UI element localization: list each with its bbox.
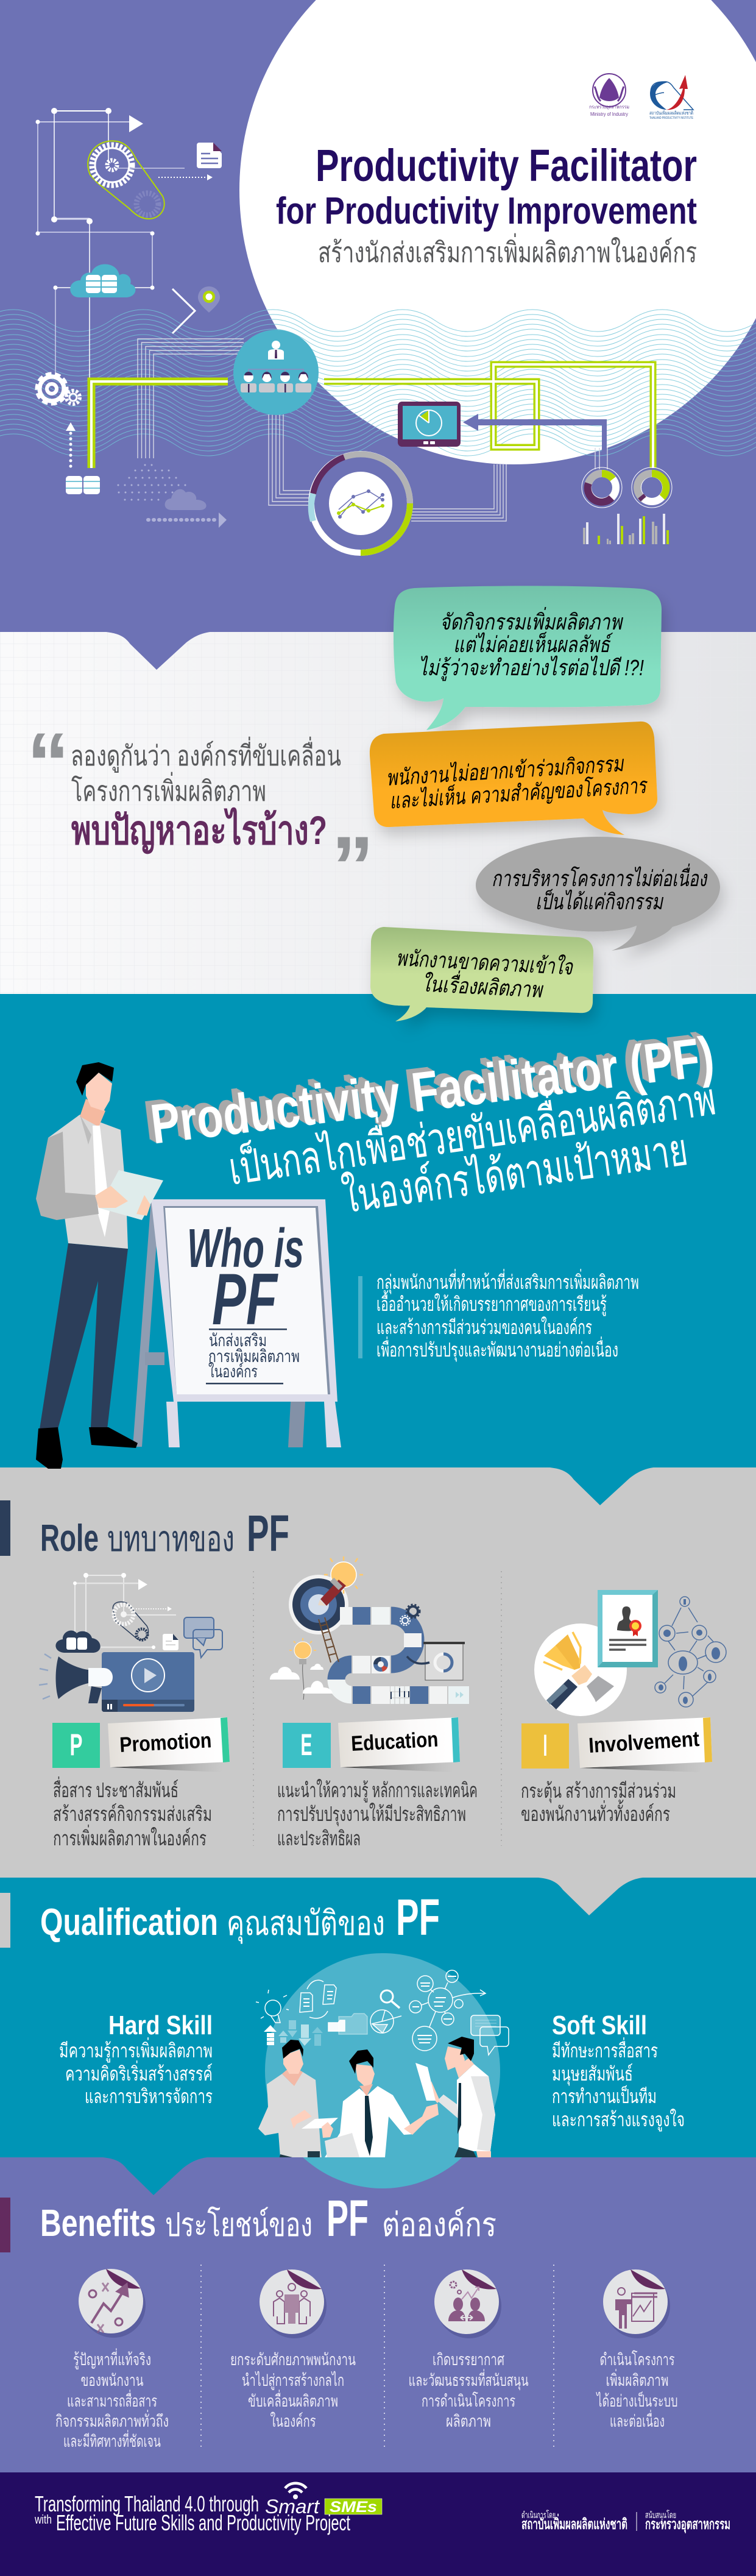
icon: strategy sticker: [79, 2269, 146, 2338]
heading: Benefits: PF: [327, 2190, 369, 2247]
text: benefit 1: กิจกรรมผลิตภาพทั่วถึง: [55, 2410, 169, 2430]
panel: hero background: [0, 0, 756, 632]
text: benefit 2: [230, 2351, 356, 2430]
logo: Thailand Productivity Institute: THAILAND PRODUCTIVITY INSTITUTE: [649, 116, 693, 120]
notch: gray into qualification section: [524, 1877, 652, 1915]
badge: I: I: [543, 1728, 547, 1762]
text block: who is PF description: และสร้างการมีส่วนร่วมของคนในองค์กร: [376, 1316, 592, 1338]
icon: geared belt: [88, 141, 164, 219]
text: promotion description: การเพิ่มผลิตภาพในองค์กร: [53, 1825, 207, 1850]
speech bubble: teal: จัดกิจกรรมเพิ่มผลิตภาพ: [440, 606, 624, 634]
doodle: magnifier and pie: [370, 1990, 401, 2033]
doodle: arrows bars: [264, 2020, 323, 2046]
logos: [589, 74, 693, 120]
text: education description: แนะนำให้ความรู้ หลักการและเทคนิค: [277, 1779, 478, 1803]
doodle: light bulb: [256, 1990, 289, 2023]
text: Hard Skill: Hard Skill: [108, 2010, 213, 2040]
label: Education: Education: [350, 1728, 439, 1756]
logo: Ministry of Industry seal: กระทรวงอุตสาหกรรม: [589, 104, 629, 110]
text: benefit 2: นำไปสู่การสร้างกลไก: [242, 2371, 344, 2390]
label: Promotion: Promotion: [119, 1728, 212, 1757]
heading: Role: Role: [40, 1517, 99, 1559]
subheading: PF mechanism: [225, 1067, 719, 1222]
badge: P: [52, 1723, 100, 1768]
footer: smart SMEs logo: SMEs: [330, 2499, 377, 2516]
text: Hard Skill: มีความรู้การเพิ่มผลิตภาพ: [59, 2037, 213, 2063]
text: education description: [277, 1779, 478, 1850]
qualification circle: [265, 1953, 500, 2188]
text: Soft Skill: Soft Skill: [552, 2010, 647, 2040]
text: benefit 1: ของพนักงาน: [80, 2371, 144, 2390]
dotted dividers: role: [253, 1571, 501, 1846]
heading: Benefits: ประโยชน์ของ: [165, 2206, 313, 2243]
panel: benefits background: [0, 2157, 756, 2472]
icon: promotion illustration: [39, 1573, 222, 1712]
notch: purple into question section: [91, 631, 219, 670]
text: involvement description: [521, 1779, 676, 1825]
text: benefit 3: และวัฒนธรรมที่สนับสนุน: [408, 2369, 529, 2391]
logo: Thailand Productivity Institute: สถาบันเพิ่มผลผลิตแห่งชาติ: [649, 110, 693, 116]
text: Soft Skill: มีทักษะการสื่อสาร: [552, 2037, 658, 2062]
icon: collaboration sticker: [434, 2269, 501, 2338]
text: benefit 2: ยกระดับศักยภาพพนักงาน: [230, 2351, 356, 2369]
panel: role background: [0, 1467, 756, 1878]
icon: education illustration: [270, 1556, 469, 1704]
footer: organizers: สนับสนุนโดย: [645, 2510, 676, 2521]
illustration: three business people: [258, 2037, 495, 2157]
notch: teal into role section: [535, 1467, 663, 1505]
icon: document: [197, 143, 222, 168]
text: benefit 3: การดำเนินโครงการ: [422, 2392, 515, 2410]
chart: donut right: [632, 467, 672, 508]
text: promotion description: สื่อสาร ประชาสัมพันธ์: [53, 1776, 178, 1801]
icon: chevron: [172, 289, 195, 333]
chart: small bars: [583, 514, 669, 544]
heading: Benefits: [0, 2190, 496, 2252]
icon: org chart circle: [233, 330, 319, 415]
footer: smart SMEs logo: Smart: [265, 2496, 320, 2517]
panel: footer background: [0, 2472, 756, 2576]
heading: Benefits: Benefits: [40, 2202, 156, 2244]
text: involvement description: กระตุ้น สร้างการมีส่วนร่วม: [521, 1779, 676, 1803]
white title circle: [239, 0, 756, 464]
person: left man in gray: [258, 2040, 338, 2157]
connector: lime rail right: [324, 364, 653, 468]
text: education description: การปรับปรุงงานให้มีประสิทธิภาพ: [277, 1803, 466, 1826]
text: benefit 3: ผลิตภาพ: [446, 2412, 491, 2430]
board text: Who is PF: PF: [212, 1258, 278, 1340]
logo: Ministry of Industry seal: [589, 74, 629, 117]
people: team row: [241, 372, 311, 392]
board text: Who is PF: การเพิ่มผลิตภาพ: [208, 1344, 300, 1366]
text: Hard Skill: และการบริหารจัดการ: [85, 2085, 213, 2107]
board text: Who is PF: Who is: [187, 1218, 304, 1279]
text: benefit 4: เพิ่มผลิตภาพ: [606, 2369, 669, 2390]
arrow: dotted right: [148, 513, 227, 528]
panel: qualification background: [0, 1878, 756, 2157]
icon: involvement illustration: [534, 1590, 726, 1716]
footer: organizers: ดำเนินการโดย: [521, 2510, 556, 2521]
dotted dividers: benefits: [201, 2265, 554, 2448]
board text: Who is PF: ในองค์กร: [208, 1361, 258, 1381]
logo: Thailand Productivity Institute: [649, 75, 693, 120]
wave line pattern: [0, 310, 756, 456]
doodle: chat: [471, 2015, 509, 2055]
text: benefit 3: [408, 2351, 529, 2430]
doodles: ideas and mind map: [256, 1970, 509, 2055]
person: right man: [415, 2037, 495, 2157]
icon: location pin: [198, 286, 220, 313]
footer: organizers: สถาบันเพิ่มผลผลิตแห่งชาติ: [521, 2513, 627, 2533]
badge: E: [283, 1723, 331, 1768]
footer: project title: Effective Future Skills and Productivity Project: [56, 2510, 350, 2535]
footer: smart SMEs logo: [265, 2483, 382, 2517]
heading: Qualification: PF: [396, 1889, 440, 1946]
text: Soft Skill: มนุษยสัมพันธ์: [552, 2063, 633, 2086]
text: Hard Skill: ความคิดริเริ่มสร้างสรรค์: [65, 2060, 213, 2085]
label: Education: [338, 1717, 460, 1772]
doodle: documents: [300, 1980, 336, 2018]
footer: organizers: [521, 2510, 730, 2534]
question text: ลองดูกันว่า องค์กรที่ขับเคลื่อน: [71, 736, 341, 773]
badge: E: E: [301, 1728, 312, 1762]
heading: Qualification: [0, 1889, 440, 1948]
notch: teal into benefits section: [88, 2157, 216, 2195]
heading: Role: PF: [247, 1505, 289, 1562]
person: center man in white: [325, 2049, 439, 2157]
question text: [71, 736, 341, 854]
text: Soft Skill: การทำงานเป็นทีม: [552, 2085, 657, 2107]
panel: question section background: [0, 632, 756, 994]
text: benefit 2: ในองค์กร: [270, 2411, 316, 2430]
text: benefit 3: เกิดบรรยากาศ: [433, 2351, 504, 2369]
heading: Qualification: Qualification: [40, 1901, 218, 1943]
speech bubble: green: พนักงานขาดความเข้าใจ: [395, 945, 574, 979]
chart: big ring with line chart: [311, 454, 410, 553]
text: benefit 1: และมีทิศทางที่ชัดเจน: [63, 2430, 161, 2450]
close quote mark: ”: [331, 818, 374, 914]
text block: who is PF description: [358, 1269, 639, 1362]
text: benefit 4: [596, 2351, 677, 2430]
text: benefit 4: ดำเนินโครงการ: [599, 2351, 675, 2369]
speech bubble: teal: [394, 586, 662, 730]
decorative dots and cloud: [117, 464, 207, 510]
text: benefit 4: และต่อเนื่อง: [610, 2410, 665, 2430]
text: involvement description: ของพนักงานทั่วทั้งองค์กร: [521, 1800, 670, 1825]
speech bubble: teal: แต่ไม่ค่อยเห็นผลลัพธ์: [453, 631, 613, 657]
text: promotion description: [53, 1776, 212, 1850]
heading: Role: [0, 1500, 289, 1562]
text: benefit 4: ได้อย่างเป็นระบบ: [596, 2390, 677, 2410]
illustration: standing man: [36, 1062, 163, 1469]
connector: lime rail left: [91, 381, 228, 468]
doodle: folders: [328, 2014, 367, 2034]
panel: who is PF background: [0, 994, 756, 1467]
open quote mark: “: [27, 715, 69, 811]
arrow: dotted up: [66, 422, 76, 468]
icon: cloud database: [70, 264, 135, 297]
connector lines: gray bundles: [138, 339, 607, 521]
chart: donut left: [582, 467, 622, 508]
badge: I: [521, 1723, 569, 1769]
question block: [27, 715, 374, 914]
label: Involvement: Involvement: [588, 1727, 700, 1758]
logo: Ministry of Industry seal: Ministry of Industry: [590, 112, 628, 117]
icon: gears left: [38, 375, 80, 404]
speech bubble: green: [370, 927, 593, 1021]
illustration: easel board: [133, 1199, 341, 1447]
heading: Qualification: คุณสมบัติของ: [227, 1904, 385, 1944]
question text: พบปัญหาอะไรบ้าง?: [71, 807, 327, 854]
text: benefit 1: รู้ปัญหาที่แท้จริง: [73, 2348, 151, 2369]
text: Hard Skill: [59, 2010, 213, 2107]
icon: presenter sticker: [603, 2269, 670, 2338]
footer: project title: Transforming Thailand 4.0 through: [35, 2491, 259, 2516]
label: Promotion: [108, 1717, 230, 1772]
arrow: purple to tablet: [463, 414, 607, 454]
person: manager: [268, 341, 284, 360]
title: [276, 140, 697, 232]
board text: Who is PF: [187, 1218, 304, 1385]
text block: who is PF description: เพื่อการปรับปรุงและพัฒนางานอย่างต่อเนื่อง: [376, 1336, 618, 1362]
arrow: dotted: [158, 174, 213, 180]
footer: project title: [34, 2483, 382, 2535]
question text: โครงการเพิ่มผลิตภาพ: [71, 772, 266, 807]
heading: Role: บทบาทของ: [107, 1519, 235, 1559]
badge: P: P: [69, 1728, 83, 1762]
text: benefit 1: และสามารถสื่อสาร: [67, 2390, 157, 2410]
icon: database: [66, 476, 100, 494]
text block: who is PF description: เอื้ออำนวยให้เกิดบรรยากาศของการเรียนรู้: [376, 1290, 607, 1316]
label: Involvement: [578, 1717, 712, 1772]
heading: Benefits: ต่อองค์กร: [382, 2207, 496, 2243]
speech bubble: orange: [370, 722, 657, 835]
icon: tablet with pie chart: [398, 402, 461, 447]
text: Soft Skill: และการสร้างแรงจูงใจ: [552, 2109, 685, 2132]
illustration: upper gear network: [35, 108, 222, 378]
speech bubble: gray: [476, 837, 720, 951]
speech bubble: orange: พนักงานไม่อยากเข้าร่วมกิจกรรม: [386, 751, 625, 790]
speech bubble: green: ในเรื่องผลิตภาพ: [421, 968, 545, 1002]
text: promotion description: สร้างสรรค์กิจกรรมส่งเสริม: [53, 1803, 212, 1825]
speech bubble: orange: และไม่เห็น ความสำคัญของโครงการ: [389, 772, 649, 814]
text: benefit 1: [55, 2348, 169, 2450]
text: benefit 2: ขับเคลื่อนผลิตภาพ: [248, 2390, 338, 2410]
speech bubble: gray: เป็นได้แค่กิจกรรม: [535, 889, 664, 914]
board text: Who is PF: นักส่งเสริม: [209, 1331, 267, 1350]
footer: project title: with: [34, 2513, 52, 2527]
text: education description: และประสิทธิผล: [277, 1827, 361, 1850]
icon: team sticker: [260, 2269, 327, 2338]
doodle: mind map: [409, 1970, 486, 2051]
text: Soft Skill: [552, 2010, 685, 2132]
speech bubble: teal: ไม่รู้ว่าจะทำอย่างไรต่อไปดี !?!: [419, 655, 644, 681]
